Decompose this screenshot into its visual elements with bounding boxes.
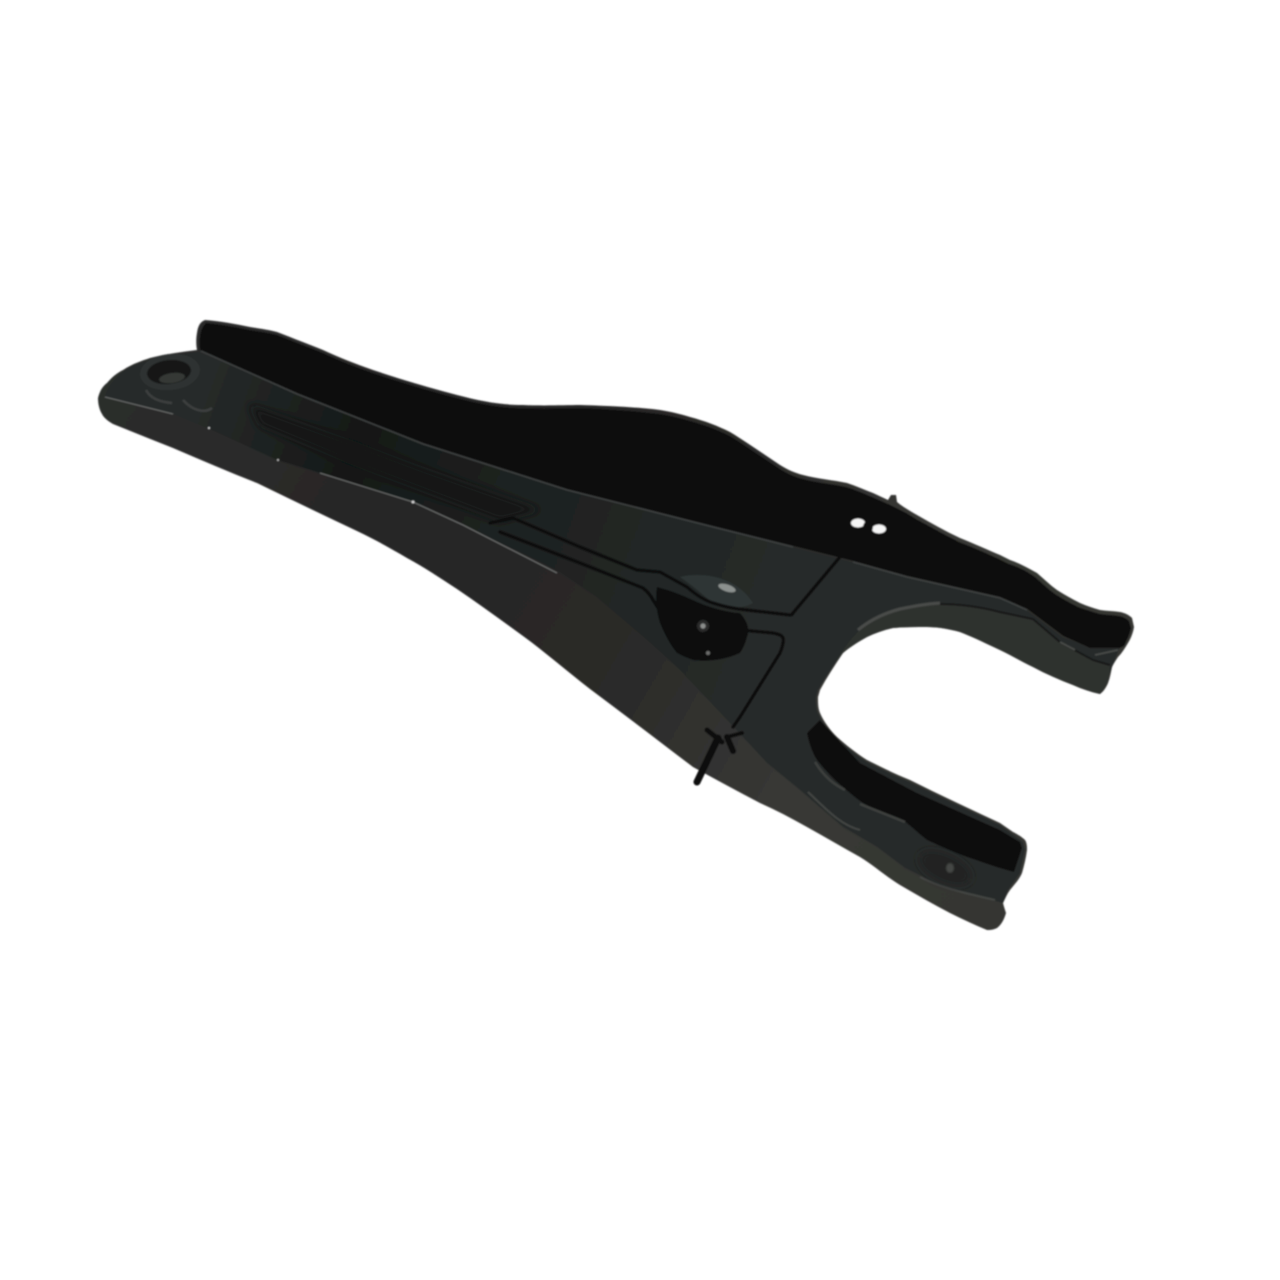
slot hole left [850, 518, 866, 528]
channel floor and fork crotch [105, 352, 1120, 903]
lower pin [697, 738, 718, 782]
flange base edge line [201, 351, 1027, 610]
centre dome highlight [680, 575, 753, 608]
upper fork arm outer band [836, 604, 1110, 694]
wire knob between holes [863, 521, 873, 533]
upper flange inner wall [200, 323, 1131, 648]
lower fork inner wall [807, 720, 1022, 872]
channel soft shading [250, 405, 540, 520]
body silhouette and lower side wall [98, 320, 1134, 930]
fork body [98, 320, 1134, 930]
slot hole right [872, 524, 886, 534]
lower fork tip recess [914, 844, 976, 892]
upper fork lip texture [858, 603, 940, 630]
wire upper run [490, 518, 793, 615]
spring clip wire [490, 518, 860, 782]
upper wire leg [793, 533, 860, 613]
scratch lines on edge [105, 397, 557, 573]
wire lower run [500, 532, 783, 727]
eyelet dome [138, 351, 202, 393]
eyelet hole [146, 358, 192, 386]
lower fork rim highlights [815, 762, 905, 822]
pivot eyelet [138, 351, 212, 411]
rivet pocket [656, 587, 748, 661]
eyelet ridges [146, 390, 212, 411]
